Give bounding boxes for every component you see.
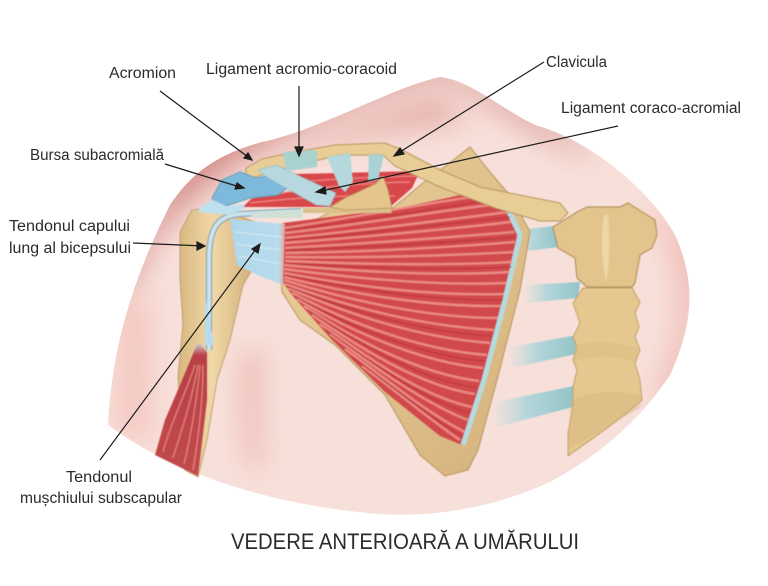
label: Bursa subacromială: Bursa subacromială [30, 147, 164, 164]
skin: shoulder silhouette [108, 77, 690, 515]
subscapularis tendon [230, 219, 285, 285]
coraco-acromial ligament [258, 165, 336, 206]
humerus [178, 208, 255, 477]
bursa subacromiala [198, 172, 290, 215]
ribs [495, 226, 580, 427]
label: Acromion: Acromion [109, 65, 176, 82]
label: Ligament coraco-acromial: Ligament coraco-acromial [561, 100, 741, 117]
label: Tendonul capului lung al bicepsului: Tendonul capului [9, 218, 130, 235]
acromio-coracoid ligaments [283, 150, 384, 192]
title: VEDERE ANTERIOARĂ A UMĂRULUI [231, 529, 579, 554]
clavicle and acromion [246, 143, 568, 221]
coracoid process [330, 176, 392, 210]
subscapularis muscle [280, 193, 520, 445]
scapula [280, 147, 530, 476]
label: Tendonul mușchiului subscapular: mușchiului subscapular [20, 490, 182, 507]
sternum [553, 203, 657, 456]
biceps muscle [155, 342, 207, 476]
supraspinatus muscle [243, 171, 420, 213]
annotation arrows [100, 62, 618, 460]
label: Clavicula: Clavicula [546, 54, 607, 71]
label: Tendonul capului lung al bicepsului: lung al bicepsului [9, 240, 131, 257]
label: Tendonul mușchiului subscapular: Tendonul [66, 469, 132, 486]
label: Ligament acromio-coracoid: Ligament acromio-coracoid [206, 61, 397, 78]
label: Tendonul mușchiului subscapular [20, 469, 182, 507]
label: Tendonul capului lung al bicepsului [9, 218, 131, 257]
biceps long head tendon [205, 210, 303, 350]
